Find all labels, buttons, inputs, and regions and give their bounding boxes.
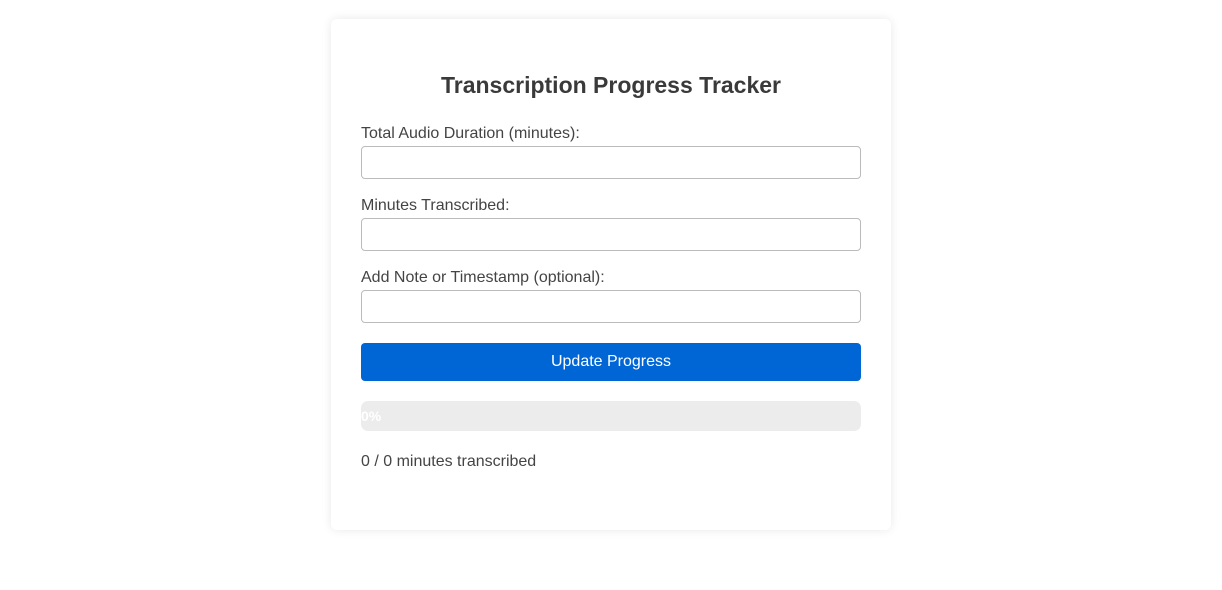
progress bar: 0% bbox=[361, 408, 381, 424]
label: note: Add Note or Timestamp (optional): bbox=[361, 269, 605, 286]
button: update progress: Update Progress bbox=[551, 353, 671, 370]
label: minutes transcribed: Minutes Transcribed: bbox=[361, 197, 510, 214]
input: minutes transcribed bbox=[361, 218, 861, 251]
input: note bbox=[361, 290, 861, 323]
title: Transcription Progress Tracker bbox=[441, 72, 781, 98]
status text: 0 / 0 minutes transcribed bbox=[361, 453, 536, 470]
progress bar bbox=[361, 401, 861, 431]
input: total duration bbox=[361, 146, 861, 179]
panel: tracker card bbox=[331, 19, 891, 530]
label: total duration: Total Audio Duration (minutes): bbox=[361, 125, 580, 142]
button: update progress bbox=[361, 343, 861, 381]
